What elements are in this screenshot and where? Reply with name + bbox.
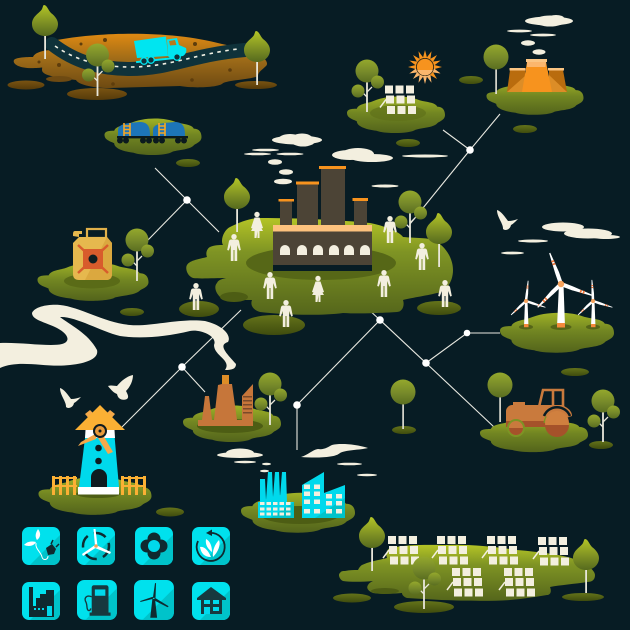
tree [426,213,452,267]
icon: bird right [497,210,518,230]
tree [352,60,384,112]
clouds [217,15,620,476]
panel: tractor [390,372,620,452]
tree [32,5,58,59]
tree [394,190,427,243]
icon: truck [134,36,186,64]
tree [573,539,599,593]
icon: factory [22,582,60,620]
tree [82,44,114,96]
icon: jerry can [73,229,112,280]
icon: turbine cycle [77,527,115,565]
tree [122,228,154,281]
panel: cyan factories [241,472,355,533]
mill tower [75,405,125,494]
icon: sun [408,50,442,84]
icon: wind turbine [134,580,174,620]
people [189,212,452,327]
panel: cooling towers [484,44,584,115]
icon: flower [135,527,173,565]
tree [488,372,512,422]
icon: leaves recycle [192,527,230,565]
factory left [258,472,294,518]
icon: house [192,582,230,620]
fence [52,476,146,495]
tree [244,31,270,85]
panel: solar panels and sun [347,50,445,133]
turbine: centre [536,252,593,328]
river [0,305,236,370]
solar panel [380,86,416,114]
floating small shadows [120,76,613,516]
turbine: left [510,281,546,327]
tree [224,178,250,232]
tree [254,372,287,425]
tree [484,44,508,94]
tree [390,380,416,429]
panel: tanker train [104,118,202,155]
factory right [302,472,345,518]
icon: leaf and plug [22,527,60,565]
network connector lines [122,114,500,450]
icon: tractor [506,390,572,437]
panel: wind turbines [500,252,614,353]
panel: solar farm [333,517,604,613]
turbine: right [577,280,613,327]
tree [408,556,441,609]
factory building [273,166,372,271]
panel: jerry can [38,228,154,301]
tree [359,517,385,571]
tree [588,390,620,442]
solar panels [383,536,569,596]
icon grid [22,527,230,620]
icon: fuel pump [77,580,117,620]
birds [60,375,133,408]
panel: refinery [183,372,287,442]
panel: central factory island [179,166,461,335]
refinery building [198,375,253,426]
panel: fuel truck on dirt road [8,5,277,100]
panel: windmill [38,375,152,515]
